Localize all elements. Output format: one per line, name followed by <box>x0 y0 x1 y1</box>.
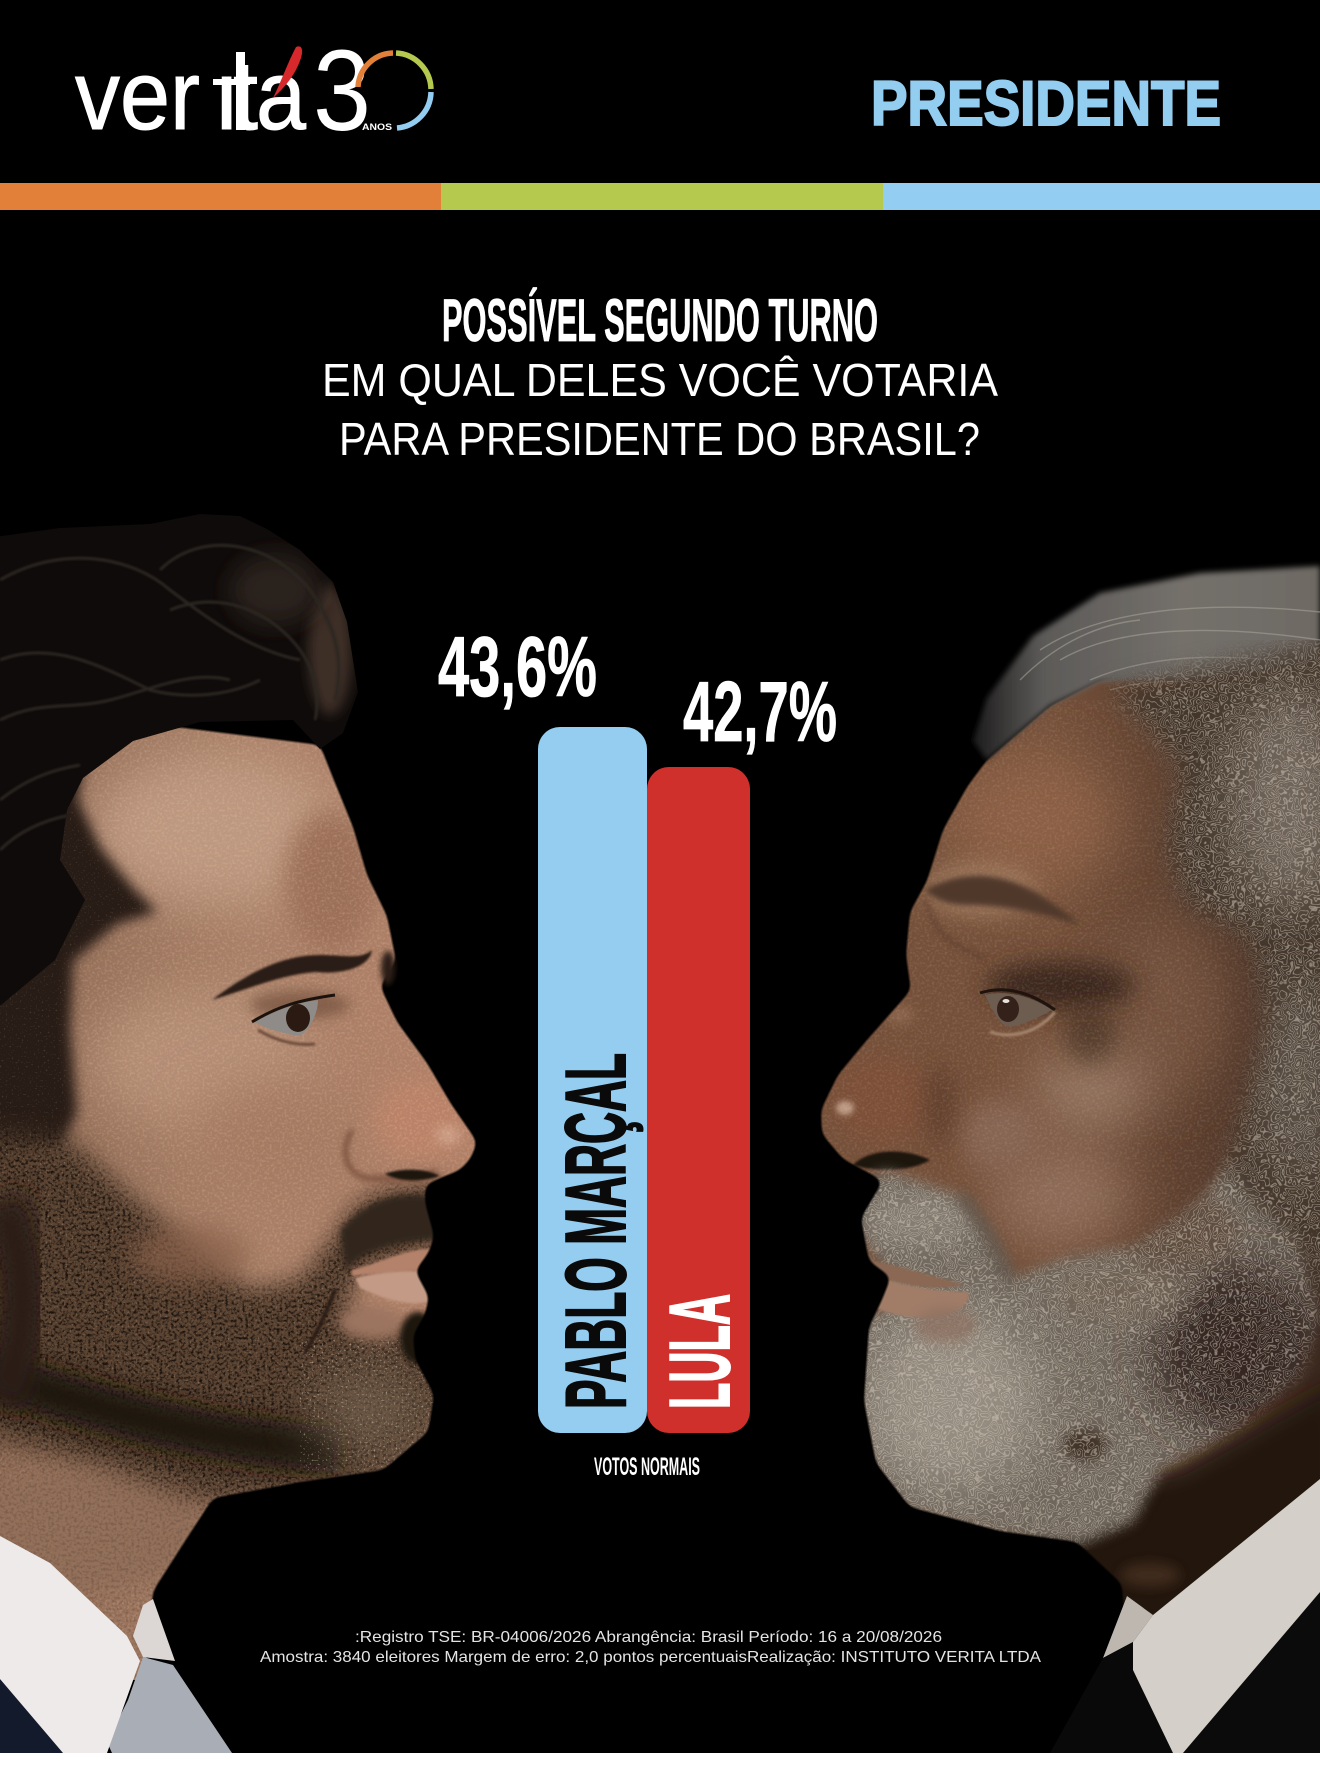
hair side <box>1108 640 1320 1310</box>
nose <box>830 1055 930 1145</box>
title line 3: PARA PRESIDENTE DO BRASIL? <box>339 413 980 465</box>
footer line 1: :Registro TSE: BR-04006/2026 Abrangência: Brasil Período: 16 a 20/08/2026 <box>355 1629 942 1646</box>
bar: Pablo Marçal <box>538 727 647 1433</box>
smile line <box>305 1290 335 1352</box>
suit jacket <box>0 1679 63 1753</box>
eye socket shadow <box>250 991 350 1019</box>
eye socket shadow <box>985 961 1135 1009</box>
nostril <box>385 1170 440 1180</box>
value: 42,7%: 42,7% <box>683 665 837 760</box>
under-lip skin <box>338 1306 402 1338</box>
portrait: right candidate in profile <box>800 566 1320 1753</box>
title block <box>322 287 998 465</box>
tie <box>107 1657 232 1753</box>
shirt collar <box>1133 1479 1320 1753</box>
bar chart <box>438 620 837 1481</box>
neck shadow <box>1034 1382 1320 1650</box>
eyebrow <box>212 950 372 1000</box>
t crossbar and stem <box>213 52 250 130</box>
footer: survey details <box>260 1629 1041 1666</box>
nose wing <box>346 1130 437 1179</box>
hair <box>0 505 365 1015</box>
bottom white strip <box>0 1753 1320 1771</box>
tie <box>1050 1642 1173 1753</box>
logo: Veritá 30 anos <box>75 27 431 155</box>
moustache <box>340 1195 440 1270</box>
hair front highlight <box>308 585 352 715</box>
wordmark: ver <box>75 40 200 150</box>
sideburn <box>0 773 162 1154</box>
value: 43,6%: 43,6% <box>438 620 597 715</box>
footer line 2: Amostra: 3840 eleitores Margem de erro: 2,0 pontos percentuaisRealização: INSTITUTO VERITA LTDA <box>260 1649 1041 1666</box>
far eyebrow tip <box>381 951 395 985</box>
beard <box>861 1159 1320 1550</box>
lips <box>352 1249 440 1276</box>
bar label: Pablo Marçal: PABLO MARÇAL <box>549 1053 644 1409</box>
eyebrow <box>925 876 1080 925</box>
anos: ANOS <box>362 122 392 132</box>
hair top <box>973 566 1320 760</box>
brow crease <box>925 900 985 958</box>
eye <box>985 993 1052 1026</box>
heading: PRESIDENTE: PRESIDENTE <box>871 69 1221 139</box>
face and neck <box>800 620 1320 1660</box>
numeral 3: 3 <box>313 27 371 155</box>
ring: green arc <box>396 53 431 89</box>
smile fold <box>960 1195 1010 1280</box>
beard <box>0 1124 446 1515</box>
eye <box>255 1000 318 1036</box>
logo: Veritá 30 anos: a <box>256 40 306 150</box>
portrait: left candidate in profile <box>0 505 500 1753</box>
logo: Veritá 30 anos: t <box>233 40 258 150</box>
title line 1: POSSÍVEL SEGUNDO TURNO <box>442 287 878 354</box>
neck <box>0 1470 210 1590</box>
title line 2: EM QUAL DELES VOCÊ VOTARIA <box>322 354 998 406</box>
ring: orange arc <box>358 53 393 87</box>
inner collar <box>133 1599 175 1661</box>
inner collar <box>1103 1596 1153 1658</box>
hair strands <box>0 545 339 850</box>
chin patch <box>310 1362 430 1458</box>
bar chart: VOTOS NORMAIS <box>594 1453 700 1481</box>
soul patch <box>400 1312 436 1364</box>
hair top strands <box>1020 607 1320 700</box>
tricolour band <box>0 183 1320 210</box>
ring: blue arc <box>397 92 431 128</box>
jaw shadow <box>0 1375 340 1450</box>
lips <box>872 1260 964 1289</box>
cheek tone <box>130 1225 250 1285</box>
red accent <box>273 46 302 98</box>
bar label: Lula: LULA <box>653 1294 748 1409</box>
logo: Veritá 30 anos: ı <box>213 40 240 150</box>
bar: Lula <box>647 767 750 1433</box>
nostril <box>853 1152 930 1170</box>
skin under lip <box>915 1307 975 1343</box>
shirt collar <box>0 1536 140 1753</box>
suit jacket <box>1183 1592 1320 1753</box>
face and neck <box>0 700 500 1690</box>
